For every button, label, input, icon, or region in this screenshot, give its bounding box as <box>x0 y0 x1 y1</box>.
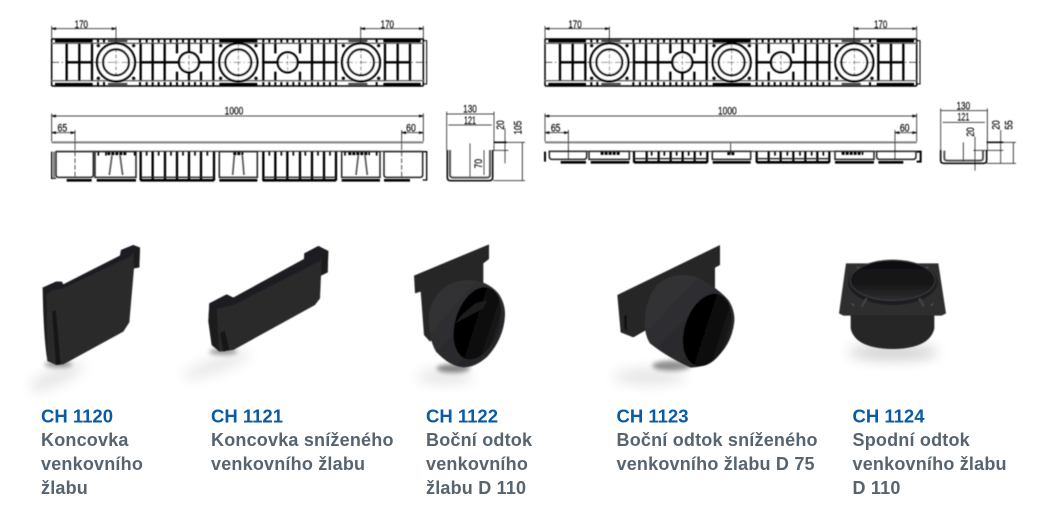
drawing: technical drawings of the lowered channel <box>545 19 1016 171</box>
caption: CH 1122: Boční odtok <box>426 430 533 450</box>
dimensions: plan view: 170 <box>75 19 88 31</box>
dimensions: side view <box>52 106 423 177</box>
caption: CH 1120: CH 1120 <box>41 406 113 426</box>
caption: CH 1121: Koncovka sníženého <box>211 430 394 450</box>
caption: CH 1122 <box>426 406 533 498</box>
product photo: CH 1120 end cap <box>26 245 140 397</box>
cross-section: standard channel with dimensions <box>447 104 525 181</box>
product photo: CH 1121 lowered end cap <box>180 246 328 384</box>
caption: CH 1122: žlabu D 110 <box>426 478 526 498</box>
caption: CH 1120: žlabu <box>41 478 88 498</box>
caption: CH 1120: venkovního <box>41 454 143 474</box>
caption: CH 1124: D 110 <box>852 478 901 498</box>
caption: CH 1124: CH 1124 <box>852 406 925 426</box>
dimensions: side view: 1000 <box>718 106 737 118</box>
caption: CH 1121: venkovního žlabu <box>211 454 365 474</box>
caption: CH 1121: CH 1121 <box>211 406 283 426</box>
cross-section: standard channel with dimensions: 121 <box>464 115 476 127</box>
product photo: CH 1123 lowered side outlet <box>613 245 740 385</box>
side view: lowered channel <box>545 142 921 163</box>
cross-section: lowered channel with dimensions: 20 <box>965 127 977 137</box>
caption: CH 1122: CH 1122 <box>426 406 498 426</box>
cross-section: lowered channel with dimensions: 55 <box>1003 120 1015 130</box>
dimensions: plan view: 170 <box>381 19 394 31</box>
cross-section: lowered channel with dimensions <box>941 100 1016 171</box>
caption: CH 1123: venkovního žlabu D 75 <box>616 454 815 474</box>
plan view: standard channel <box>52 39 427 86</box>
plan view: lowered channel <box>545 39 920 86</box>
dimensions: side view: 65 <box>57 123 67 135</box>
product photo: CH 1124 bottom outlet <box>839 260 946 360</box>
drawing: technical drawings of the standard channel <box>52 19 525 181</box>
dimensions: side view: 65 <box>551 123 560 135</box>
dimensions: side view <box>545 106 917 160</box>
cross-section: lowered channel with dimensions: 130 <box>956 100 970 112</box>
caption: CH 1123: Boční odtok sníženého <box>616 430 818 450</box>
caption: CH 1121 <box>211 406 394 474</box>
cross-section: lowered channel with dimensions: 20 <box>991 120 1003 130</box>
caption: CH 1124: Spodní odtok <box>852 430 971 450</box>
caption: CH 1122: venkovního <box>426 454 528 474</box>
cross-section: standard channel with dimensions: 70 <box>473 159 485 168</box>
cross-section: standard channel with dimensions: 20 <box>495 120 507 130</box>
dimensions: side view: 60 <box>900 123 909 135</box>
caption: CH 1120: Koncovka <box>41 430 129 450</box>
dimensions: plan view <box>52 19 423 43</box>
cross-section: standard channel with dimensions: 105 <box>513 121 525 134</box>
caption: CH 1123 <box>616 406 818 474</box>
dimensions: side view: 60 <box>406 123 416 135</box>
caption: CH 1120 <box>41 406 143 498</box>
product photo: CH 1122 side outlet <box>414 244 510 384</box>
cross-section: standard channel with dimensions: 130 <box>463 104 477 116</box>
cross-section: lowered channel with dimensions: 121 <box>957 112 969 124</box>
dimensions: plan view: 170 <box>568 19 582 31</box>
dimensions: plan view <box>545 19 917 43</box>
dimensions: side view: 1000 <box>225 106 243 118</box>
caption: CH 1123: CH 1123 <box>616 406 688 426</box>
caption: CH 1124: venkovního žlabu <box>852 454 1007 474</box>
dimensions: plan view: 170 <box>874 19 887 31</box>
caption: CH 1124 <box>852 406 1007 498</box>
side view: standard channel <box>52 142 427 181</box>
